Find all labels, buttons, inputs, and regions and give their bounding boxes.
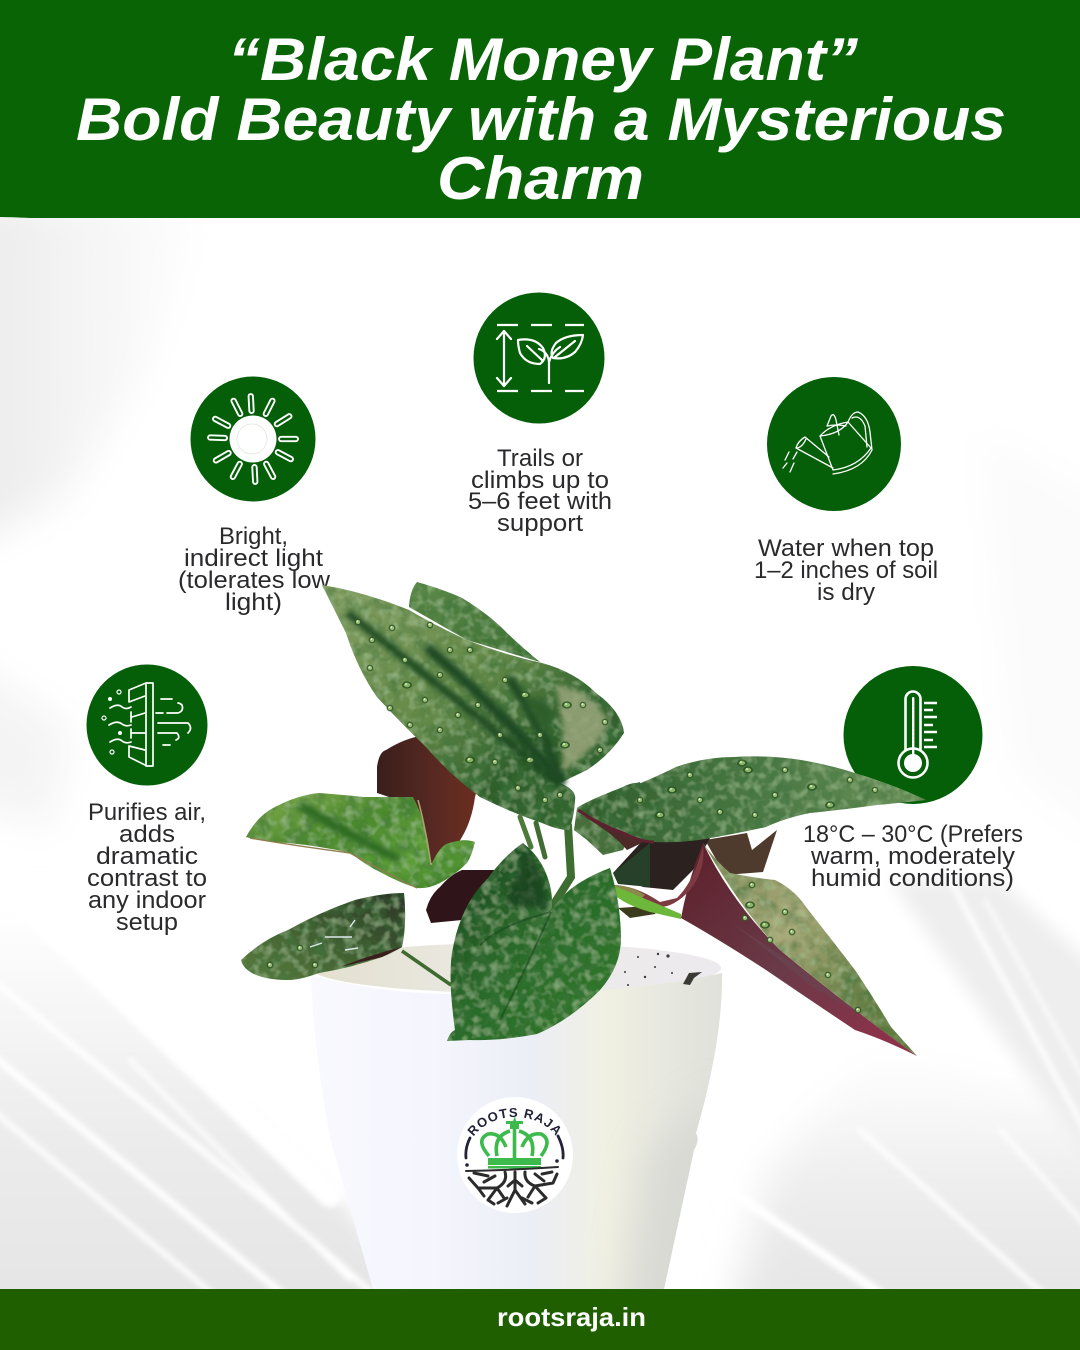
icon: plant height in green circle [474,292,604,424]
text: growth: 5–6 feet with [468,488,612,515]
text: watering: 1–2 inches of soil [754,557,938,584]
text: watering: Water when top [758,535,934,562]
text: light: indirect light [184,545,323,572]
text: growth: support [497,510,583,537]
text: light: Bright, [219,523,288,550]
icon: sun in green circle [190,376,316,502]
text: air purifying: Purifies air, [88,799,206,826]
title [76,26,1006,212]
plant: right pointed leaf [681,843,917,1056]
text: air purifying: setup [116,909,178,936]
logo sticker: Roots Raja: ROOTS RAJA [467,1108,560,1136]
text: light: light) [225,589,282,616]
text: air purifying: any indoor [88,887,206,914]
plant: maroon leaves behind [377,735,777,923]
logo sticker: Roots Raja [457,1097,573,1213]
icon: air purifier in green circle [86,664,208,786]
plant: lower left dark leaf [241,893,451,985]
text: light [178,523,331,616]
text: air purifying: contrast to [87,865,207,892]
text: temperature: warm, moderately [810,843,1015,870]
text: air purifying: dramatic [96,843,198,870]
plant: upper back leaf [409,582,540,662]
text: growth [468,445,612,537]
text: temperature: humid conditions) [811,865,1014,892]
text: watering [754,535,938,606]
text: air purifying [87,799,207,936]
icon: watering can in green circle [767,377,901,511]
icon: thermometer in green circle [844,666,982,804]
plant: large front leaf [447,843,621,1041]
plant: big top leaf with water drops [322,585,624,830]
roots [466,1167,558,1206]
title: Charm [437,145,644,212]
crown [482,1128,547,1158]
text: growth: climbs up to [471,467,609,494]
white plant pot [316,944,722,1289]
text: growth: Trails or [497,445,583,472]
text: temperature: 18°C – 30°C (Prefers [803,821,1023,848]
text: temperature [803,821,1023,892]
footer bar [0,1289,1080,1350]
text: air purifying: adds [119,821,175,848]
text: light: (tolerates low [178,567,331,594]
header banner [0,0,1080,218]
text: watering: is dry [817,579,875,606]
title: “Black Money Plant” [228,26,858,93]
plant: right back leaf [574,782,648,855]
plant: right top leaf [578,756,926,842]
footer website: rootsraja.in [497,1302,646,1332]
plant: stem band and bright petiole [612,845,703,919]
plant: stems [520,817,571,907]
title: Bold Beauty with a Mysterious [76,86,1006,153]
plant: left light green leaf [246,793,475,888]
soil specks [624,953,702,986]
